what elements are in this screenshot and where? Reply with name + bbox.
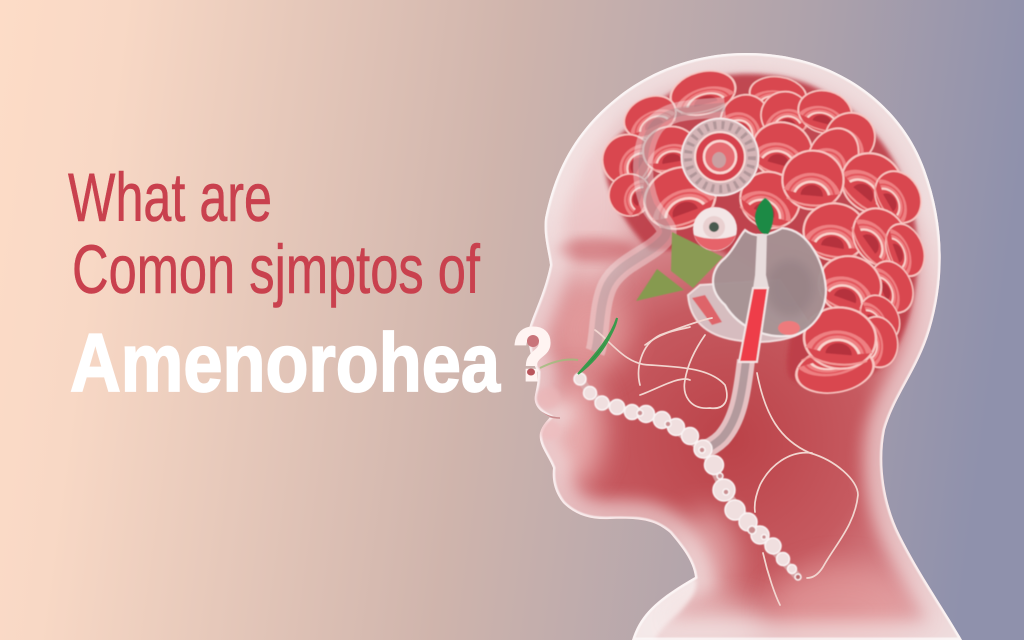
red vertical tube [702,288,768,451]
red patch [778,321,800,335]
title: What are: What are [68,159,272,236]
bead chain [574,373,801,580]
tube lower translucent section [702,360,746,451]
translucent coiled tube [595,107,758,352]
olive wedge upper [671,232,723,288]
green structures [636,232,723,301]
brain base mass [605,74,918,389]
tube red section [739,288,768,362]
green nostril thread [540,359,578,368]
grey lower dome [688,280,810,342]
skin shading and highlights [528,53,962,640]
head silhouette [528,53,962,640]
title: Amenorohea: Amenorohea [70,316,501,409]
title: Comon sjmptos of: Comon sjmptos of [72,231,481,308]
eye ring structure [693,207,737,251]
nerve fibres [595,318,858,605]
pale stem [753,234,769,288]
grey thalamus [688,228,826,342]
grey body [713,228,826,336]
green optic strip [578,318,617,374]
head and neck illustration [528,53,962,640]
question mark: ? [513,313,553,396]
spiral ring [682,118,758,196]
tube body [595,107,725,352]
olive wedge lower [636,269,684,301]
green leaf [755,198,773,234]
small red inner fold [692,295,722,325]
green leaf and stem [753,198,773,288]
brain folds [593,64,931,399]
